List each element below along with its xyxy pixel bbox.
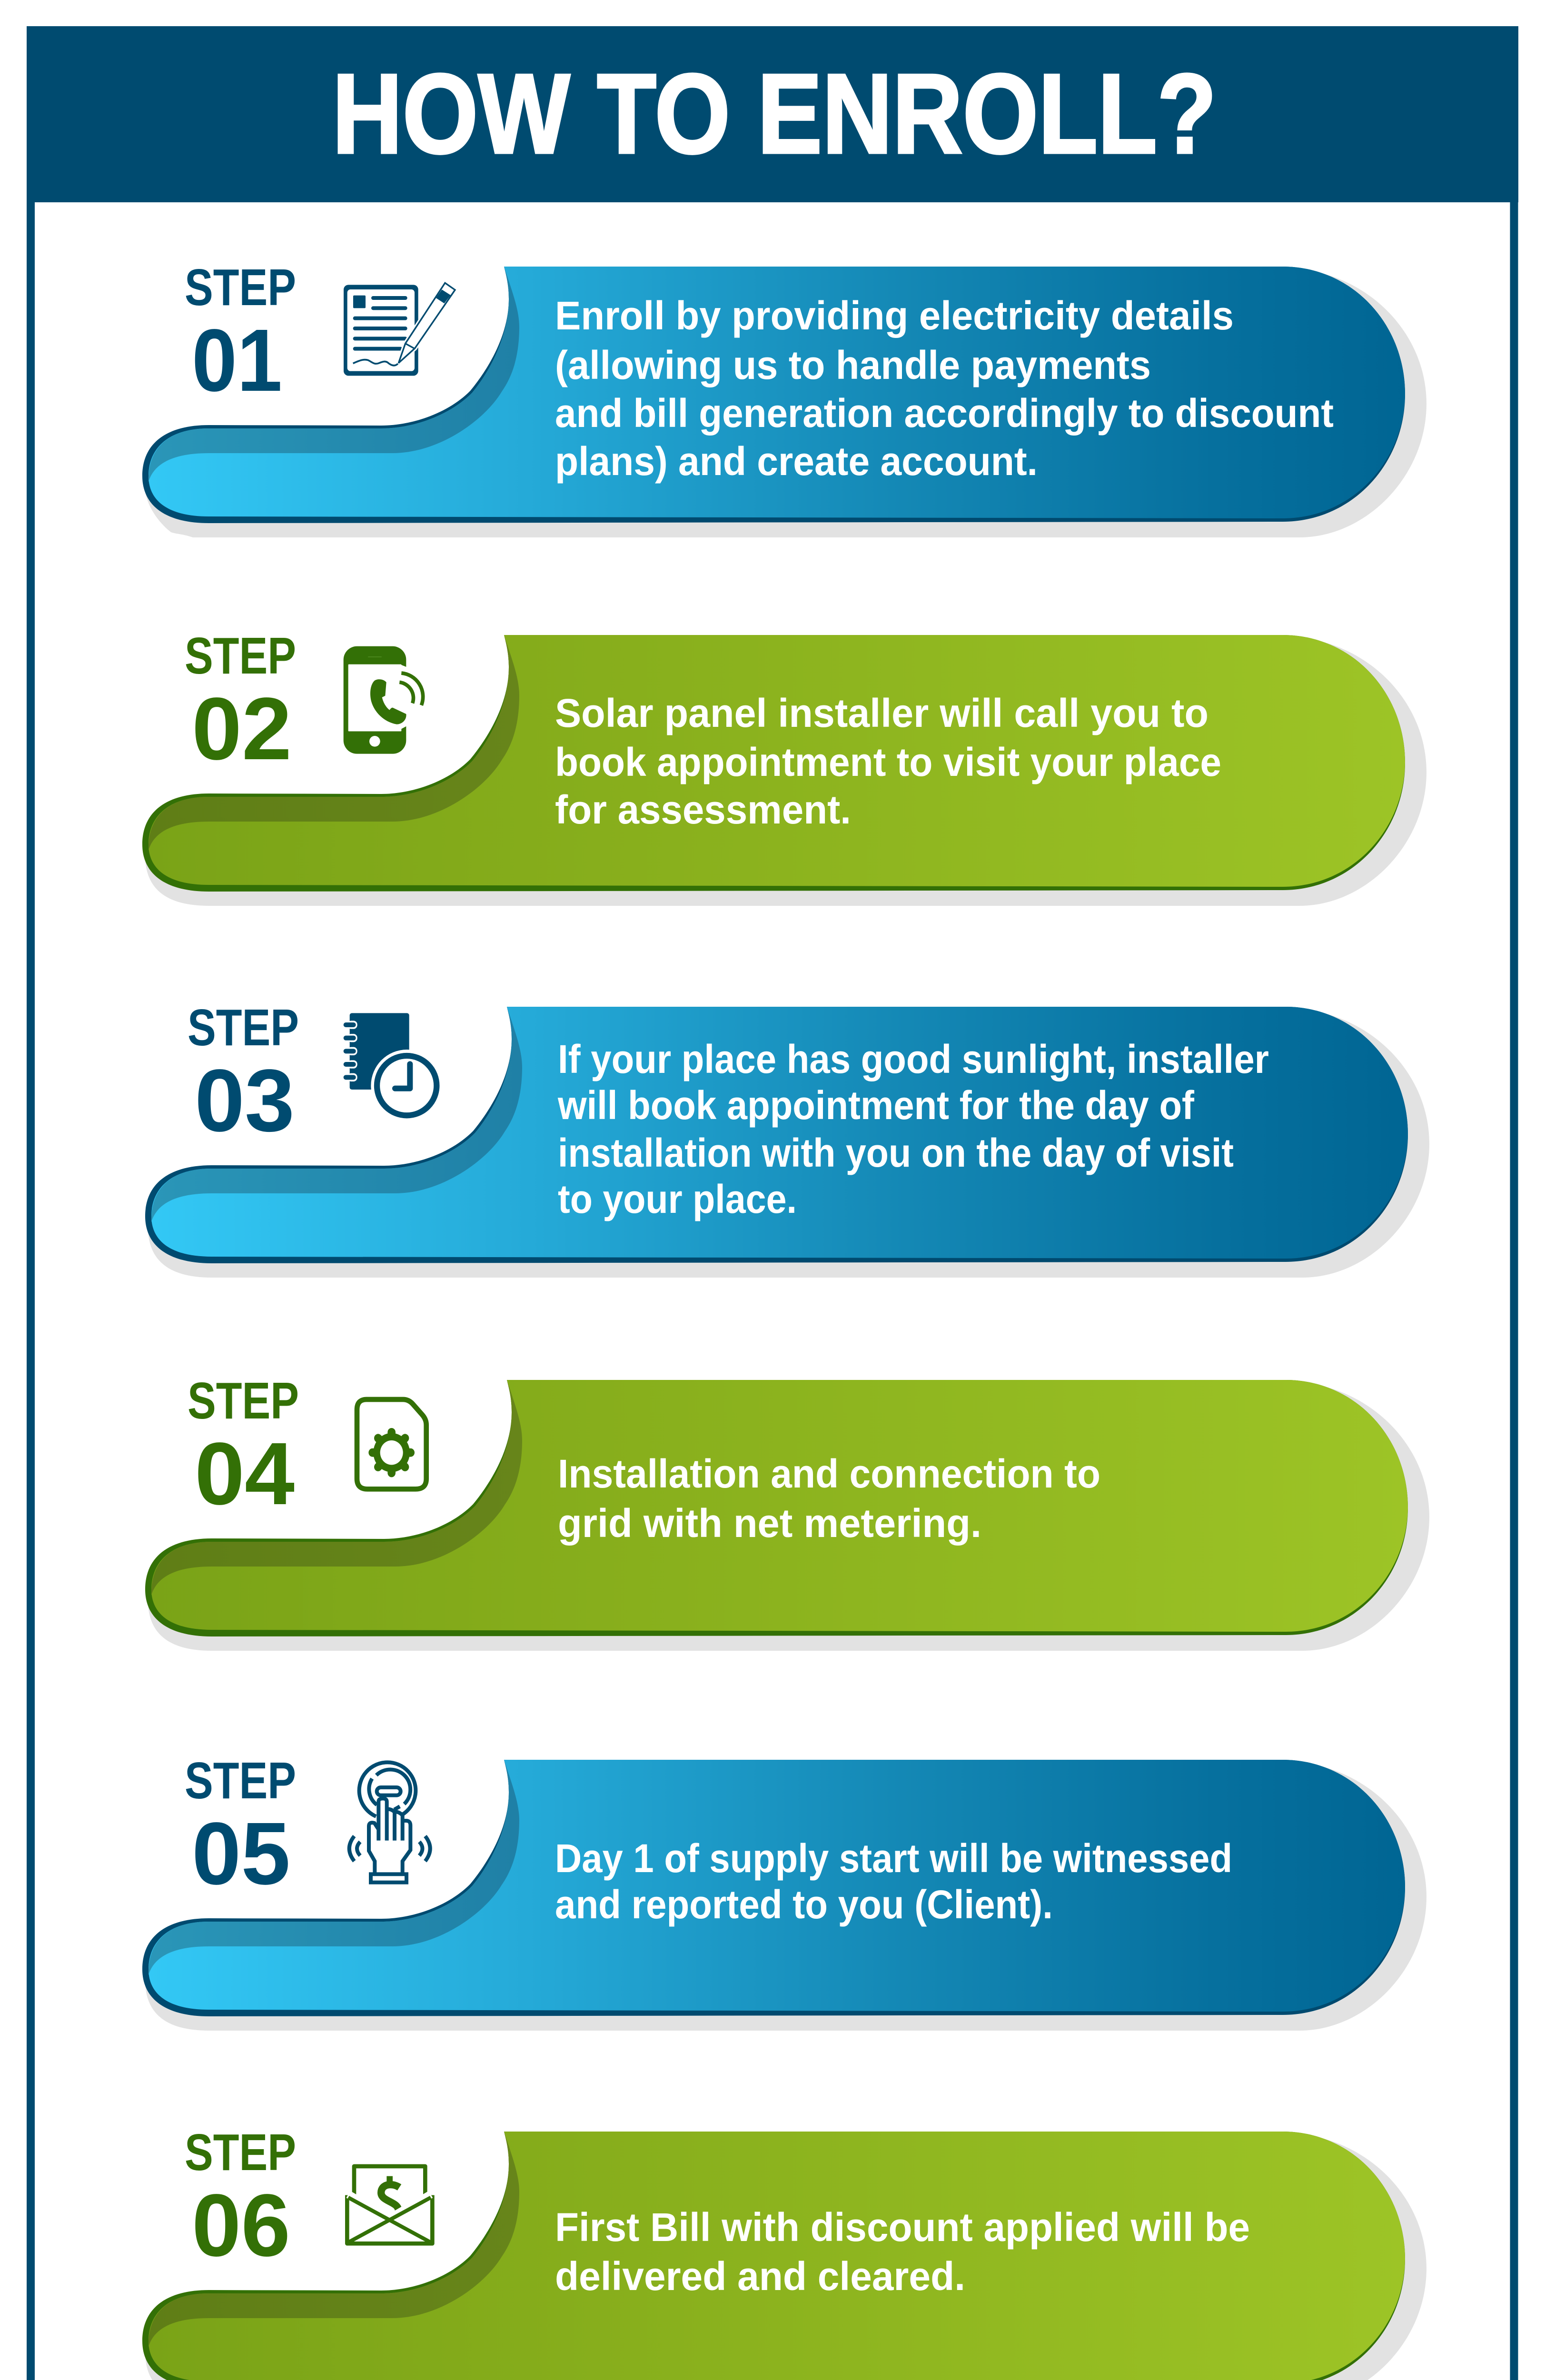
ribbon: step 5 — [142, 1760, 1426, 2031]
panel: step 2 — [142, 627, 1426, 906]
text block: and reported to you (Client). — [555, 1882, 1053, 1927]
text block — [557, 1037, 1269, 1221]
ribbon: step 1 — [142, 267, 1426, 537]
text block — [555, 1836, 1232, 1927]
step label: 02 — [192, 680, 292, 778]
icon: hand pressing button — [349, 1762, 430, 1883]
panel: step 5 — [142, 1752, 1426, 2031]
header band — [27, 26, 1518, 202]
step label: STEP — [185, 258, 296, 317]
text block: First Bill with discount applied will be — [555, 2205, 1250, 2250]
panel: step 3 — [145, 999, 1429, 1278]
step label: STEP — [185, 627, 296, 685]
text block: Day 1 of supply start will be witnessed — [555, 1836, 1232, 1881]
step label: 01 — [192, 311, 282, 410]
text block: Enroll by providing electricity details — [555, 293, 1234, 338]
text block: If your place has good sunlight, installer — [558, 1037, 1269, 1081]
step label — [188, 999, 299, 1150]
step label: STEP — [188, 1372, 299, 1430]
text block: Installation and connection to — [558, 1451, 1100, 1496]
icon: envelope with dollar bill — [347, 2166, 432, 2243]
step label: STEP — [185, 2123, 296, 2182]
text block: for assessment. — [555, 787, 851, 832]
step label — [185, 258, 296, 410]
ribbon: step 2 — [142, 635, 1426, 906]
step label — [185, 2123, 296, 2275]
text block: delivered and cleared. — [555, 2254, 965, 2299]
text block: and bill generation accordingly to discount — [555, 391, 1334, 436]
icon: file with gear — [357, 1399, 426, 1489]
text block — [555, 293, 1334, 484]
text block: installation with you on the day of visit — [558, 1130, 1234, 1175]
panel: step 1 — [142, 258, 1426, 537]
step label: 04 — [195, 1425, 295, 1523]
text block: (allowing us to handle payments — [555, 343, 1151, 387]
ribbon: step 6 — [142, 2132, 1426, 2380]
ribbon: step 3 — [145, 1007, 1429, 1278]
step label: 05 — [192, 1805, 290, 1903]
text block — [555, 691, 1221, 832]
step label — [185, 627, 296, 778]
panel: step 6 — [142, 2123, 1426, 2380]
step label: STEP — [185, 1752, 296, 1810]
text block: plans) and create account. — [555, 439, 1038, 484]
text block — [555, 2205, 1250, 2299]
text block: grid with net metering. — [558, 1501, 981, 1546]
text block: book appointment to visit your place — [555, 740, 1221, 784]
step label — [188, 1372, 299, 1523]
icon: phone call — [344, 646, 423, 754]
text block: will book appointment for the day of — [557, 1083, 1195, 1128]
panel: step 4 — [145, 1372, 1429, 1651]
step label: STEP — [188, 999, 299, 1057]
text block: to your place. — [558, 1177, 797, 1221]
text block: Solar panel installer will call you to — [555, 691, 1208, 735]
icon: notebook and clock — [344, 1013, 443, 1121]
step label — [185, 1752, 296, 1903]
title: HOW TO ENROLL? — [332, 51, 1217, 177]
step label: 03 — [195, 1051, 295, 1150]
icon: document and pen — [344, 283, 455, 376]
step label: 06 — [192, 2176, 290, 2275]
ribbon: step 4 — [145, 1380, 1429, 1651]
text block — [558, 1451, 1100, 1546]
